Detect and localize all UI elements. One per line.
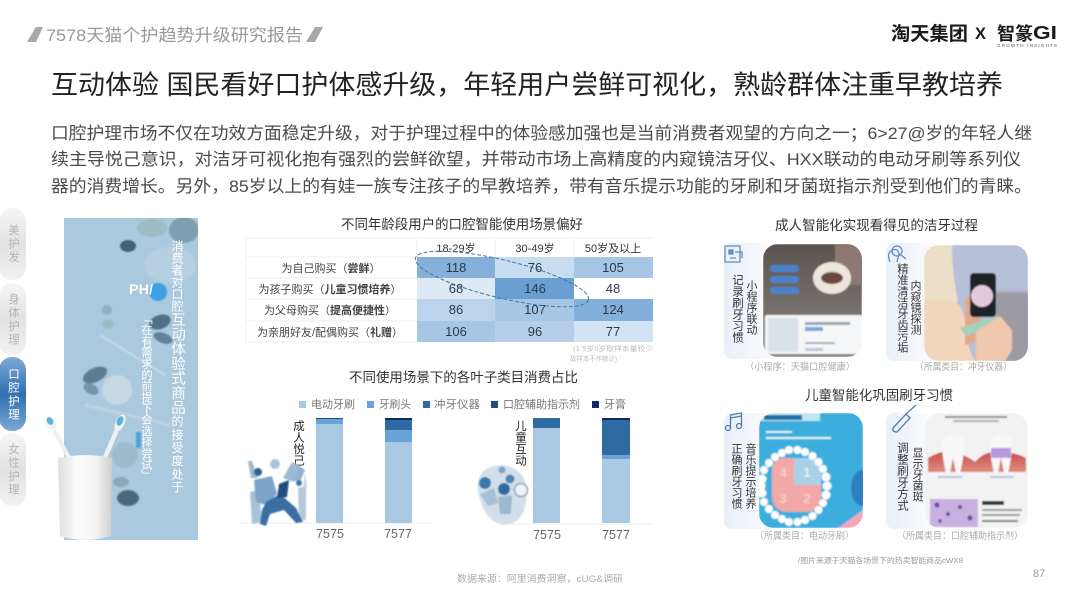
panel botanical decoration (80, 217, 199, 506)
cell values: 107 (524, 302, 546, 317)
cell values: 68 (449, 281, 463, 296)
cell values: 124 (602, 302, 624, 317)
logo: 智篆 (997, 23, 1033, 44)
bar 7577 adult (385, 418, 412, 523)
caption: （所属类目：口腔辅助指示剂） (897, 530, 1023, 542)
card text: 调整刷牙方式 (896, 442, 909, 511)
row labels: 为自己购买（尝鲜） (282, 261, 380, 275)
table footnote: (1 5岁0岁取样本量较少 (573, 344, 653, 353)
caption: （所属类目：冲牙仪器） (915, 361, 1012, 373)
report header tag: 7578天猫个护趋势升级研究报告 (46, 26, 303, 45)
intro paragraph (51, 124, 1032, 196)
caption: （所属类目：电动牙刷） (755, 530, 854, 542)
card: music brush: 音乐提示培养 (744, 442, 756, 510)
nav: 女性护理 (0, 433, 26, 506)
heading: adult visual cleaning: 成人智能化实现看得见的洁牙过程 (775, 217, 978, 233)
card: mini program (724, 243, 865, 373)
nav: 女性护理: 女性护理 (7, 442, 20, 497)
row labels: 为父母购买（提高便捷性） (264, 303, 396, 317)
row labels: 为亲朋好友/配偶购买（礼赠） (257, 325, 403, 339)
card text: 记录刷牙习惯 (731, 274, 744, 344)
column headers: 18-29岁 (436, 241, 476, 255)
product image: plaque (925, 413, 1028, 528)
axis labels adult: 7577 (384, 527, 412, 541)
axis labels children (533, 528, 630, 542)
vertical statement: 消费者对口腔 互动体验式商品 的接受度处于 (169, 240, 185, 494)
illustration: children (478, 465, 528, 525)
sidebar navigation (0, 208, 26, 506)
nav: 身体护理 (0, 283, 26, 355)
left toothbrush (43, 414, 70, 460)
vertical quote: 「在有需求的前提下会选择尝试」 (140, 313, 153, 481)
icon: electric toothbrush (893, 405, 916, 432)
axis labels children: 7577 (602, 528, 630, 542)
image source footnote: /图片来源于天猫各场景下的热卖智能商品cWX8 (798, 555, 963, 565)
nav: 口腔护理 (0, 357, 26, 431)
blue accent spot (149, 283, 167, 301)
label: 儿童互动: 儿童互动 (514, 420, 527, 466)
product image: tooth map: 4 (779, 465, 787, 480)
column headers: 50岁及以上 (585, 241, 641, 255)
logo: GROWTH INSIGHTS (997, 43, 1057, 48)
logo: GI (1033, 23, 1057, 43)
right toothbrush (104, 413, 128, 460)
axis labels children: 7575 (533, 528, 561, 542)
product image: user with device (924, 245, 1030, 362)
icon: music note (726, 413, 742, 430)
row labels: 为孩子购买（儿童习惯培养） (258, 282, 402, 296)
logo (891, 23, 1057, 48)
cell values: 48 (606, 281, 620, 296)
nav: 口腔护理: 口腔护理 (7, 368, 20, 422)
table footnote (570, 344, 653, 363)
table footnote: 故样本不作统计) (570, 354, 617, 363)
axis labels adult: 7575 (316, 527, 344, 541)
chart legend: 冲牙仪器 (434, 397, 480, 411)
cell values: 106 (445, 324, 467, 339)
data source: 数据来源：阿里消费洞察，cUG&调研 (457, 573, 624, 585)
product image: tooth map: 1 (803, 465, 811, 480)
chart legend: 电动牙刷 (311, 398, 355, 411)
heading: stacked bar charts: 不同使用场景下的各叶子类目消费占比 (349, 369, 578, 385)
card: endoscope: 内窥镜探测 (909, 279, 922, 336)
illustration: adults (248, 459, 307, 526)
PH label: PH/ (129, 281, 153, 297)
heat cells (417, 257, 653, 342)
caption: （小程序：天猫口腔健康） (745, 361, 855, 373)
column headers (436, 241, 641, 255)
card: plaque indicator: 显示牙菌斑 (911, 447, 924, 503)
card text: 正确刷牙习惯 (730, 443, 742, 510)
heading: usage scenario table: 不同年龄段用户的口腔智能使用场景偏好 (341, 216, 583, 232)
chart legend (299, 397, 626, 411)
nav: 美护发: 美护发 (7, 223, 20, 264)
intro paragraph: 器的消费增长。另外，85岁以上的有娃一族专注孩子的早教培养，带有音乐提示功能的牙刷和牙菌斑指示剂受到他们的青睐。 (51, 177, 1032, 196)
cell values: 86 (449, 302, 463, 317)
logo: 淘天集团 (891, 23, 968, 45)
icon: QR code (725, 246, 742, 262)
product image: tooth map: 2 (803, 491, 811, 506)
card: mini program: 小程序联动 (745, 280, 758, 335)
cell values: 118 (446, 260, 466, 275)
card text: 精准清洁牙齿污垢 (896, 263, 909, 353)
intro paragraph: 续主导悦己意识，对洁牙可视化抱有强烈的尝鲜欲望，并带动市场上高精度的内窥镜洁牙仪、HXX联动的电动牙刷等系列仪 (51, 150, 1021, 169)
card: plaque indicator (886, 405, 1028, 542)
icon: toothbrushes in cup (43, 413, 128, 540)
logo: X (975, 24, 987, 43)
stacked bar chart: children (512, 418, 652, 542)
column headers: 30-49岁 (515, 241, 555, 255)
heat table (246, 238, 653, 342)
chart legend: 牙膏 (604, 397, 626, 411)
panel: consumer acceptance (64, 217, 199, 540)
chart legend: 牙刷头 (379, 398, 411, 411)
product image: app screen (763, 244, 865, 357)
product image: tooth map: 3 (779, 491, 787, 506)
nav: 美护发 (0, 208, 26, 280)
title: 互动体验 国民看好口护体感升级，年轻用户尝鲜可视化，熟龄群体注重早教培养 (51, 70, 1003, 100)
cell values (445, 260, 624, 339)
axis labels adult (316, 527, 412, 541)
dashed highlight ellipse (411, 240, 593, 318)
stacked bar chart: adult (240, 418, 432, 541)
card: music brush (724, 413, 873, 542)
page number: 87 (1033, 568, 1045, 580)
chart legend: 口腔辅助指示剂 (503, 397, 580, 411)
cup (58, 455, 112, 540)
cell values: 105 (602, 260, 624, 275)
card: endoscope (886, 243, 1030, 373)
cell values: 96 (528, 324, 542, 339)
nav: 身体护理: 身体护理 (7, 292, 20, 347)
cell values: 77 (606, 324, 620, 339)
bar 7575 adult (316, 418, 343, 523)
bar 7575 children (533, 418, 560, 523)
bar 7577 children (602, 418, 630, 523)
heading: children habit: 儿童智能化巩固刷牙习惯 (805, 387, 953, 403)
row labels (257, 261, 403, 339)
label: 成人悦己: 成人悦己 (292, 420, 305, 466)
cell values: 76 (528, 260, 542, 275)
icon: tooth magnifier (889, 246, 906, 262)
intro paragraph: 口腔护理市场不仅在功效方面稳定升级，对于护理过程中的体验感加强也是当前消费者观望的方向之一；6>27@岁的年轻人继 (51, 124, 1032, 143)
cell values: 146 (524, 281, 546, 296)
product image: tooth map (759, 413, 863, 528)
